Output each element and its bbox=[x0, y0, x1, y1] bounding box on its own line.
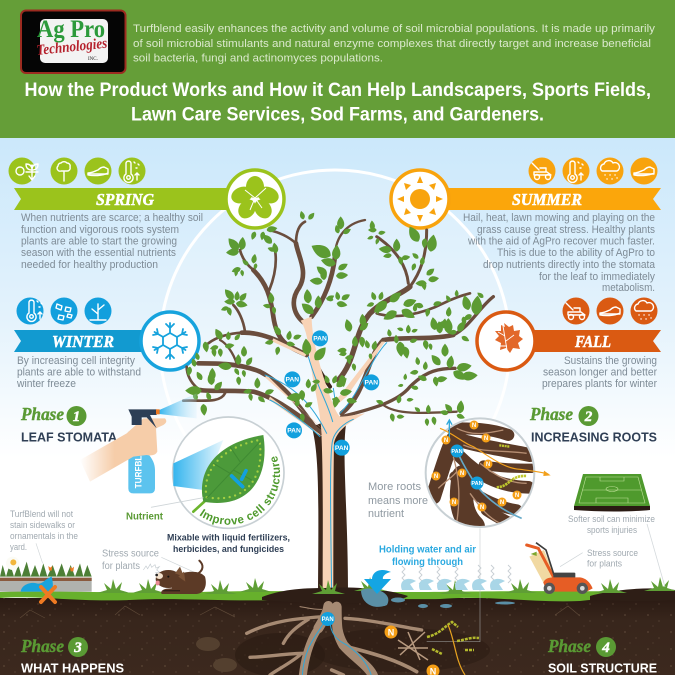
fall text bbox=[542, 355, 657, 390]
icon: snowflake bbox=[141, 312, 199, 370]
mixable note: Mixable with liquid fertilizers, bbox=[167, 532, 290, 544]
N markers: N bbox=[388, 628, 394, 638]
phase 1 heading: 1 bbox=[73, 409, 80, 425]
N markers: N bbox=[515, 493, 519, 499]
soil ground bbox=[0, 577, 675, 675]
main heading: How the Product Works and How it Can Help Landscapers, Sports Fields, bbox=[24, 80, 651, 101]
phase 2 heading: 2 bbox=[584, 409, 593, 425]
spray bottle and hand: TURFBLEND bbox=[133, 438, 143, 488]
PAN markers bbox=[450, 444, 484, 490]
dark mound bbox=[262, 587, 408, 603]
trunk bbox=[312, 413, 348, 593]
sidewalk note: TurfBlend will not bbox=[10, 509, 73, 519]
summer banner bbox=[445, 188, 661, 210]
icon: sports field bbox=[574, 474, 650, 512]
PAN marker: PAN bbox=[322, 617, 334, 623]
stress source dog bbox=[102, 548, 206, 594]
N markers: N bbox=[460, 471, 464, 477]
spring text: plants are able to start the growing bbox=[21, 236, 177, 248]
icon: lawn mower bbox=[527, 543, 593, 594]
PAN markers: PAN bbox=[335, 445, 349, 452]
fall banner bbox=[525, 330, 661, 352]
grass strip bbox=[0, 591, 675, 601]
summer banner: SUMMER bbox=[512, 190, 582, 209]
icon: maple leaf bbox=[477, 312, 535, 370]
fall icons bbox=[562, 298, 658, 324]
summer text: This is due to the ability of AgPro to bbox=[497, 247, 655, 259]
phase 1 heading bbox=[20, 404, 118, 444]
sidewalk note bbox=[0, 509, 92, 602]
leaves bbox=[185, 210, 485, 426]
summer icons bbox=[528, 158, 658, 184]
logo: Technologies bbox=[36, 36, 108, 59]
PAN markers: PAN bbox=[313, 336, 327, 343]
fall text: Sustains the growing bbox=[564, 355, 657, 367]
white seasonal ring bbox=[160, 170, 510, 520]
winter banner bbox=[14, 330, 150, 352]
PAN markers: PAN bbox=[451, 449, 463, 455]
intro text: soil bacteria, fungi and actinomyces populations. bbox=[133, 52, 383, 64]
panel: phase 3: 3 bbox=[73, 640, 82, 656]
root system bbox=[247, 606, 422, 675]
spring banner: SPRING bbox=[96, 190, 155, 209]
spring banner bbox=[14, 188, 230, 210]
winter text: plants are able to withstand bbox=[17, 366, 141, 378]
PAN markers: PAN bbox=[471, 481, 483, 487]
softer soil note: sports injuries bbox=[587, 525, 637, 535]
main heading bbox=[24, 80, 651, 126]
icon: water arrow and puddles bbox=[361, 570, 515, 608]
grass tufts bbox=[97, 577, 675, 594]
root magnifier bbox=[426, 418, 551, 642]
winter text: By increasing cell integrity bbox=[17, 355, 135, 367]
logo: INC. bbox=[88, 57, 98, 62]
intro text: of soil microbial stimulants and natural enzyme complexes that directly target and increase beneficial bbox=[133, 38, 651, 50]
softer soil note: Softer soil can minimize bbox=[568, 514, 655, 524]
spray bottle and hand bbox=[80, 393, 197, 493]
tree bbox=[183, 210, 493, 593]
burst root bbox=[398, 632, 428, 660]
PAN markers: PAN bbox=[365, 380, 378, 387]
stress source dog: for plants bbox=[102, 561, 140, 572]
summer text: grass cause great stress. Healthy plants bbox=[477, 224, 655, 236]
summer text: for the leaf to immediately bbox=[539, 271, 655, 283]
PAN marker bbox=[321, 612, 335, 626]
summer text bbox=[463, 212, 656, 294]
holding water: Holding water and air bbox=[379, 544, 476, 556]
summer text: with the aid of AgPro recover much faster. bbox=[467, 236, 655, 248]
improve cell structure: Improve cell structure bbox=[200, 456, 280, 525]
spring text: When nutrients are scarce; a healthy soil bbox=[21, 212, 203, 224]
N markers: N bbox=[484, 436, 488, 442]
PAN markers: PAN bbox=[287, 428, 301, 435]
icon: air squiggles bbox=[401, 565, 511, 590]
panel: winter bbox=[14, 298, 199, 390]
winter text bbox=[16, 355, 141, 390]
N markers: N bbox=[434, 474, 438, 480]
spring text: season with the essential nutrients bbox=[21, 247, 176, 259]
sidewalk note: ornamentals in the bbox=[10, 531, 78, 541]
softer soil note bbox=[568, 514, 655, 535]
stress source mower: Stress source bbox=[587, 548, 638, 558]
root flow lines bbox=[302, 620, 372, 675]
more roots text: means more bbox=[368, 495, 428, 507]
stress source mower bbox=[527, 543, 638, 594]
summer text: drop nutrients directly into the stomata bbox=[483, 259, 656, 271]
winter icons bbox=[16, 298, 112, 324]
summer text: Hail, heat, lawn mowing and playing on the bbox=[463, 212, 655, 224]
intro text bbox=[133, 23, 656, 64]
PAN markers bbox=[284, 330, 379, 456]
N markers: N bbox=[444, 438, 448, 444]
panel: phase 1 leaf stomata bbox=[20, 394, 290, 555]
cream sap stem bbox=[265, 317, 385, 593]
icon: dog bbox=[143, 557, 206, 594]
phase 1 heading: LEAF STOMATA bbox=[21, 430, 118, 444]
N markers: N bbox=[486, 462, 490, 468]
header panel bbox=[0, 0, 675, 138]
stress source mower: for plants bbox=[587, 558, 622, 568]
stress source dog: Stress source bbox=[102, 548, 159, 560]
summer text: metabolism. bbox=[602, 282, 655, 294]
winter text: winter freeze bbox=[16, 378, 76, 390]
more roots text: More roots bbox=[368, 481, 421, 493]
stomata circle bbox=[151, 417, 284, 528]
nutrient label: Nutrient bbox=[126, 512, 164, 522]
holding water bbox=[361, 544, 515, 608]
main heading: Lawn Care Services, Sod Farms, and Gardeners. bbox=[131, 104, 544, 126]
N markers bbox=[384, 626, 440, 675]
panel: phase 3 bbox=[20, 636, 124, 675]
panel: phase 3: Phase bbox=[20, 636, 64, 656]
PAN markers: PAN bbox=[286, 377, 299, 384]
sidewalk note: yard. bbox=[10, 542, 27, 552]
more roots text: nutrient bbox=[368, 508, 404, 520]
panel: summer bbox=[391, 158, 661, 294]
underground nutrients and worms bbox=[384, 622, 479, 675]
N markers: N bbox=[480, 505, 484, 511]
spring text: needed for healthy production bbox=[21, 259, 158, 271]
phase 2 heading bbox=[529, 404, 657, 444]
logo bbox=[21, 10, 126, 73]
N markers: N bbox=[452, 500, 456, 506]
panel: phase 2 increasing roots bbox=[368, 404, 665, 642]
blue flow lines bbox=[265, 343, 387, 593]
more roots text bbox=[368, 481, 428, 520]
spring text bbox=[21, 212, 203, 271]
N markers: N bbox=[500, 500, 504, 506]
panel: phase 4: 4 bbox=[601, 640, 610, 656]
sidewalk note: stain sidewalks or bbox=[10, 520, 75, 530]
panel: phase 4: Phase bbox=[547, 636, 591, 656]
mixable note: herbicides, and fungicides bbox=[173, 544, 284, 555]
mixable note bbox=[167, 532, 290, 555]
worms bbox=[427, 622, 479, 654]
holding water: flowing through bbox=[392, 556, 463, 568]
phase 2 heading: Phase bbox=[529, 404, 573, 424]
icon: sun bbox=[391, 170, 449, 228]
phase 1 heading: Phase bbox=[20, 404, 64, 424]
intro text: Turfblend easily enhances the activity and volume of soil microbial populations. It is made up primarily bbox=[133, 23, 656, 35]
icon: hibiscus bbox=[226, 170, 284, 228]
winter banner: WINTER bbox=[52, 332, 114, 351]
fall text: prepares plants for winter bbox=[542, 378, 657, 390]
logo: Ag Pro bbox=[37, 16, 105, 43]
panel: fall bbox=[477, 298, 661, 390]
branches bbox=[183, 220, 493, 432]
phase 2 heading: INCREASING ROOTS bbox=[531, 430, 657, 444]
spring text: function and vigorous roots system bbox=[21, 224, 179, 236]
panel: spring bbox=[8, 158, 284, 271]
fall text: season longer and better bbox=[543, 366, 657, 378]
sky background bbox=[0, 138, 675, 458]
spring icons bbox=[8, 158, 146, 184]
fall banner: FALL bbox=[574, 332, 611, 351]
panel: phase 4 bbox=[547, 636, 657, 675]
N markers bbox=[432, 420, 522, 512]
roots bbox=[247, 606, 422, 675]
icon: sidewalk with grass bbox=[0, 543, 92, 592]
icon: orange cross bbox=[41, 587, 55, 602]
N markers: N bbox=[472, 423, 476, 429]
